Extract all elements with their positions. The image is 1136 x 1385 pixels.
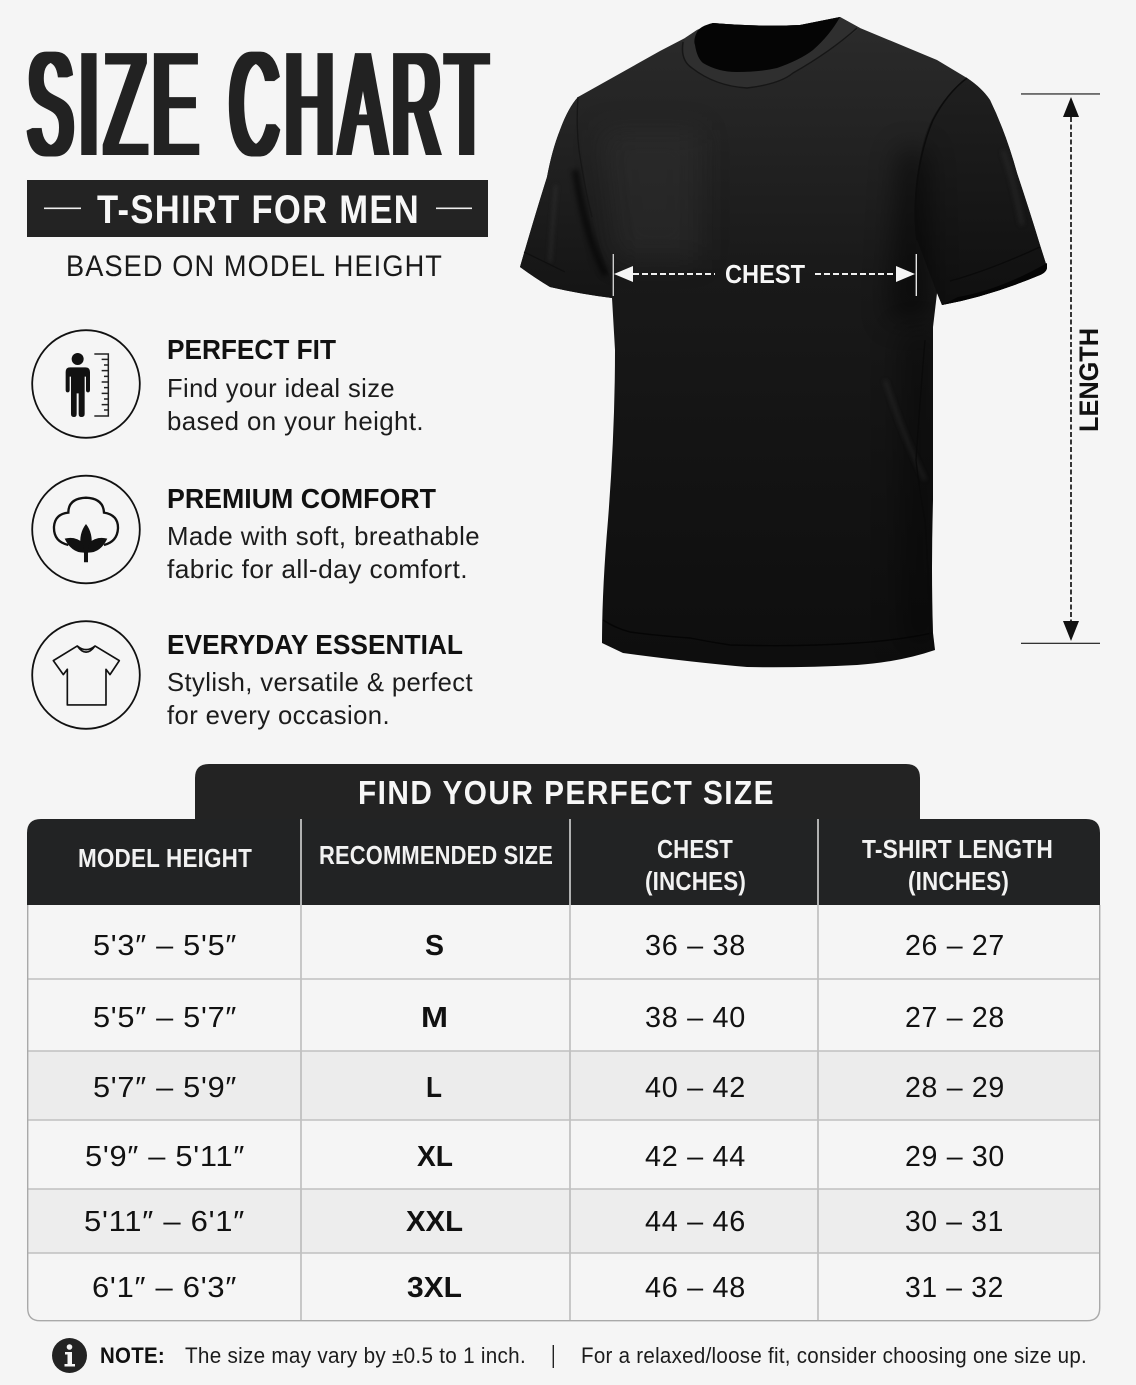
feature: perfect fit: PERFECT FIT [167,334,336,365]
row XXL: 30 – 31 [905,1206,1004,1238]
table header row: MODEL HEIGHT [78,843,252,873]
row 3XL [92,1272,1004,1304]
subtitle banner [27,180,488,237]
row XL: 5'9″ – 5'11″ [85,1141,245,1173]
row M: M [421,1002,448,1034]
row S: S [425,930,444,962]
table row lines [28,979,1099,1253]
row L [93,1072,1005,1104]
feature: perfect fit [32,330,424,438]
chest measurement arrow: CHEST [725,259,805,289]
feature: premium comfort [32,476,480,584]
icon: cotton boll [32,476,140,583]
feature: everyday essential [32,621,473,730]
row L: 40 – 42 [645,1072,746,1104]
fabric shading [550,130,1022,650]
length measurement arrow [1021,93,1104,644]
footnote: For a relaxed/loose fit, consider choosing one size up. [581,1343,1087,1368]
row M [93,1002,1005,1034]
icon: info [52,1338,87,1373]
row XXL: 5'11″ – 6'1″ [84,1206,245,1238]
table tab heading [195,764,920,819]
row 3XL: 31 – 32 [905,1272,1004,1304]
text: SIZE CHART [28,22,494,187]
row S: 36 – 38 [645,930,746,962]
chest measurement arrow [613,254,917,296]
table header row: (INCHES) [908,866,1009,896]
icon: t-shirt outline [32,621,140,729]
feature: premium comfort: Made with soft, breathable [167,521,480,551]
row XL: 42 – 44 [645,1141,746,1173]
size table [27,819,1100,1321]
row M: 27 – 28 [905,1002,1005,1034]
sleeve cuff opening [942,263,1047,305]
feature: everyday essential: Stylish, versatile & perfect [167,667,473,697]
feature: premium comfort: PREMIUM COMFORT [167,483,436,514]
table border [28,905,1100,1321]
icon: person with height ruler [32,330,140,438]
right sleeve [915,78,1047,305]
length measurement arrow: LENGTH [1074,328,1104,432]
row 3XL: 6'1″ – 6'3″ [92,1272,237,1304]
feature: premium comfort: fabric for all-day comfort. [167,554,468,584]
row 3XL: 46 – 48 [645,1272,746,1304]
row 3XL: 3XL [407,1272,462,1304]
footnote [52,1338,1087,1373]
row XL: 29 – 30 [905,1141,1005,1173]
row L: 28 – 29 [905,1072,1005,1104]
row M: 38 – 40 [645,1002,746,1034]
row XL: XL [417,1141,453,1173]
row XXL: 44 – 46 [645,1206,746,1238]
row L: 5'7″ – 5'9″ [93,1072,237,1104]
collar [682,17,860,88]
subheading: BASED ON MODEL HEIGHT [66,250,443,283]
footnote: NOTE: [100,1343,165,1368]
table header row: RECOMMENDED SIZE [319,840,553,870]
table grid [301,905,818,1321]
row S: 26 – 27 [905,930,1005,962]
seams and stitching [524,78,1040,646]
feature: perfect fit: based on your height. [167,406,424,436]
table tab heading: FIND YOUR PERFECT SIZE [358,774,775,811]
row XXL [84,1206,1004,1238]
table header row [27,819,1100,905]
feature: everyday essential: EVERYDAY ESSENTIAL [167,629,463,660]
row S: 5'3″ – 5'5″ [93,930,237,962]
row L: L [426,1072,442,1104]
row M: 5'5″ – 5'7″ [93,1002,237,1034]
feature: everyday essential: for every occasion. [167,700,390,730]
row XL [85,1141,1005,1173]
feature: perfect fit: Find your ideal size [167,373,395,403]
footnote: The size may vary by ±0.5 to 1 inch. [185,1343,526,1368]
table header row: CHEST [657,834,733,864]
table header row: (INCHES) [645,866,746,896]
t-shirt illustration [520,17,1047,667]
row S [93,930,1005,962]
table header row: T-SHIRT LENGTH [862,834,1053,864]
subtitle banner: T-SHIRT FOR MEN [97,188,420,232]
row XXL: XXL [406,1206,463,1238]
left sleeve [520,97,612,298]
